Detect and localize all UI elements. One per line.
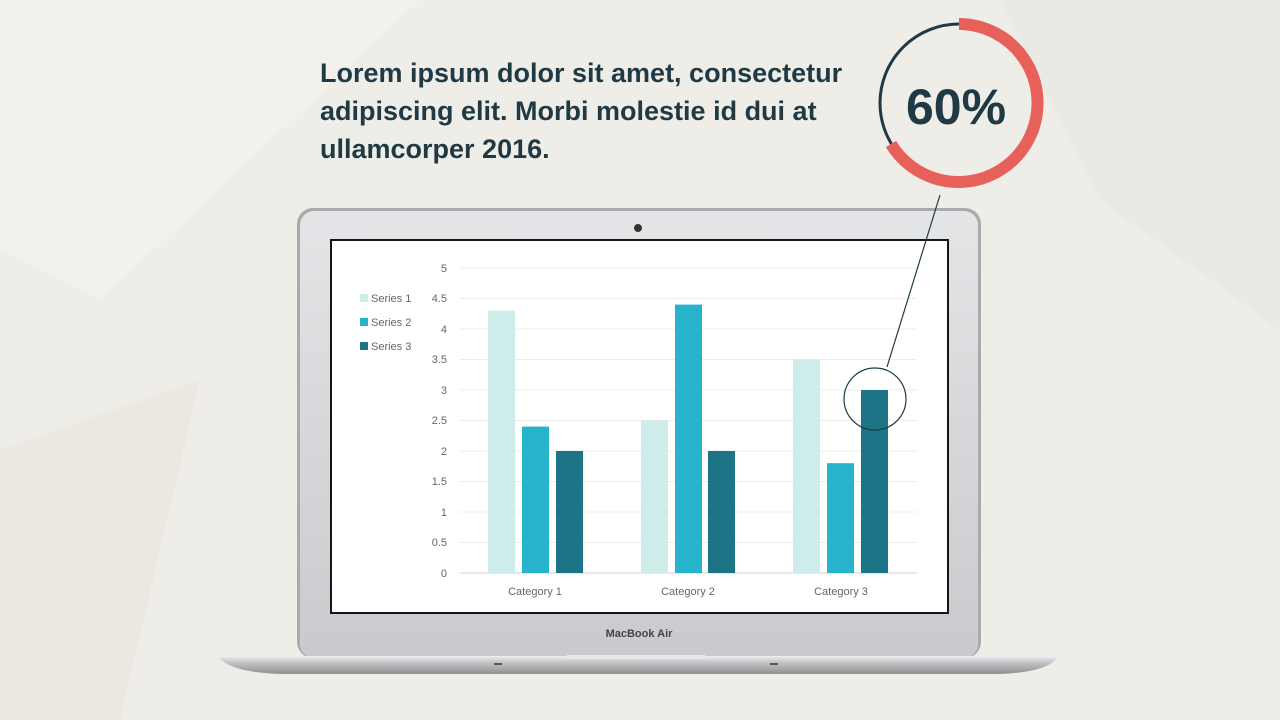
bar chart: Category 2 [661,586,715,598]
bar chart: 2.5 [432,415,447,427]
title text: Lorem ipsum dolor sit amet, consectetur adipiscing elit. Morbi molestie id dui at ullamcorper 2016. [320,58,842,164]
bar chart: Category 3 [814,586,868,598]
legend: Series 1 [371,293,411,305]
legend: Series 3 [371,341,411,353]
bar chart: 5 [441,263,447,275]
laptop lid [297,208,981,658]
bar chart [360,263,917,598]
highlight circle and pointer [844,195,940,430]
bar chart: 1.5 [432,476,447,488]
bar chart: 0 [441,568,447,580]
bar chart: 3.5 [432,354,447,366]
laptop lid: MacBook Air [606,628,673,640]
laptop base [218,655,1058,674]
legend: Series 2 [371,317,411,329]
bar chart: 0.5 [432,537,447,549]
bar chart: 1 [441,507,447,519]
bar chart: 3 [441,385,447,397]
bar chart: Category 1 [508,586,562,598]
60% ring [880,24,1038,182]
60% ring: 60% [906,79,1006,135]
bar chart: 4.5 [432,293,447,305]
legend [360,293,411,353]
bar chart: 4 [441,324,447,336]
bar chart: 2 [441,446,447,458]
